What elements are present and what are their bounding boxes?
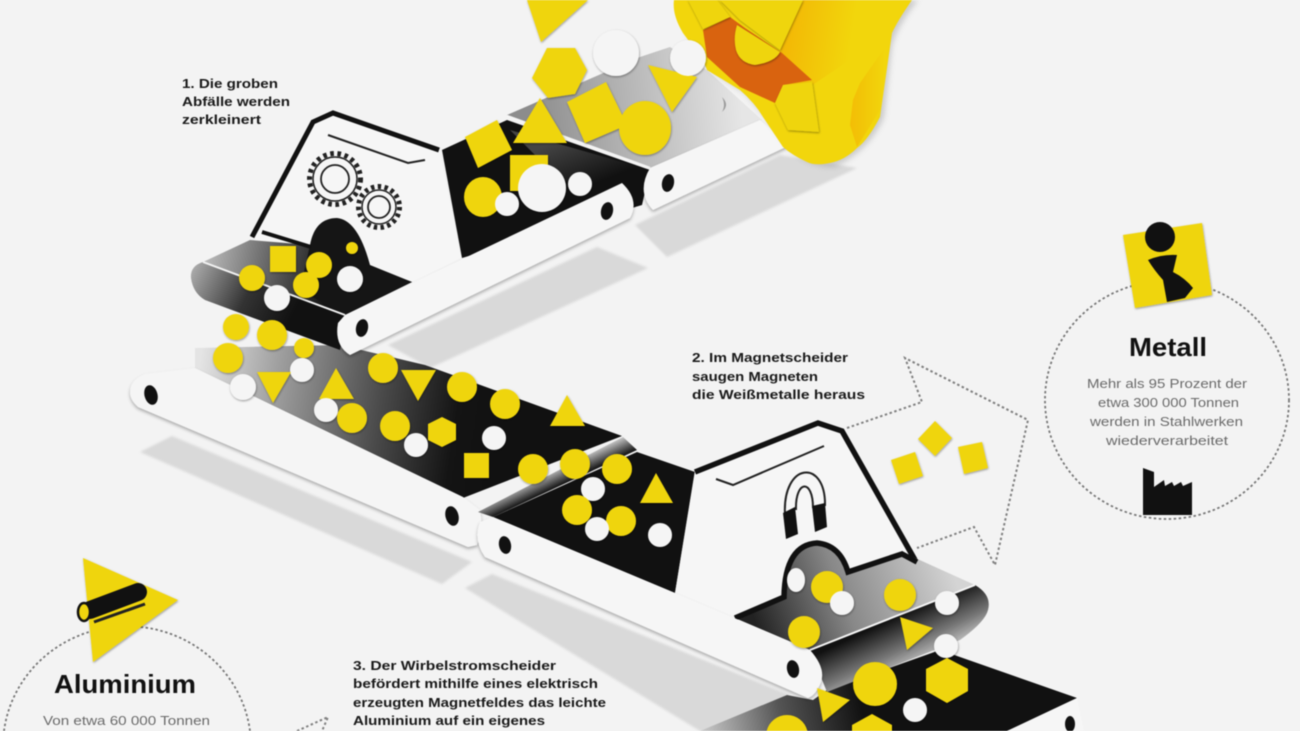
panel: metal [1045, 222, 1289, 519]
scrap pieces: after magnet [767, 568, 968, 731]
text: step 1 [182, 76, 290, 127]
conveyor: long middle belt [130, 345, 622, 547]
machine: magnetic separator [477, 420, 989, 698]
icon: metal card [1123, 222, 1212, 308]
icon: factory [1143, 468, 1192, 515]
icon: small gear [358, 186, 400, 228]
text: step 3: Aluminium auf ein eigenes [353, 713, 545, 728]
text: metal body: etwa 300 000 Tonnen [1098, 395, 1239, 410]
text: step 2 [692, 350, 865, 402]
text: step 2: saugen Magneten [692, 369, 818, 384]
text: step 2: die Weißmetalle heraus [692, 387, 865, 402]
icon: horseshoe magnet [783, 472, 827, 539]
extracted ferrous squares [891, 421, 988, 484]
machine: shredder [191, 113, 634, 355]
scrap pieces: falling onto shredder [464, 0, 706, 217]
panel: aluminium [4, 558, 250, 731]
text: step 3: befördert mithilfe eines elektrisch [353, 676, 598, 691]
scrap in scoop [688, 0, 819, 132]
scrap pieces: shredded output [213, 242, 673, 547]
text: metal body: werden in Stahlwerken [1089, 414, 1243, 429]
text: aluminium body: Von etwa 60 000 Tonnen [43, 713, 210, 728]
text: metal body: Mehr als 95 Prozent der [1087, 376, 1248, 391]
text: step 3: erzeugten Magnetfeldes das leichte [353, 695, 606, 710]
text: step 1: zerkleinert [182, 112, 262, 127]
text: step 1: Abfälle werden [182, 94, 290, 109]
hand with scoop [674, 0, 918, 167]
icon: large gear [310, 154, 360, 204]
text: step 3: 3. Der Wirbelstromscheider [353, 658, 556, 673]
arrow: dashed to metal [847, 358, 1028, 565]
floor shadows [140, 155, 857, 731]
text: step 3 [353, 658, 606, 728]
conveyor: bottom belt [700, 650, 1084, 731]
heading: aluminium: Aluminium [54, 669, 196, 699]
text: step 2: 2. Im Magnetscheider [692, 350, 848, 365]
arrow: dashed to aluminium [297, 717, 328, 731]
heading: metal: Metall [1129, 332, 1207, 362]
icon: aluminium roll [78, 558, 178, 662]
text: metal body [1087, 376, 1248, 448]
conveyor: top feed belt [442, 47, 790, 258]
text: step 1: 1. Die groben [182, 76, 278, 91]
text: metal body: wiederverarbeitet [1105, 433, 1228, 448]
